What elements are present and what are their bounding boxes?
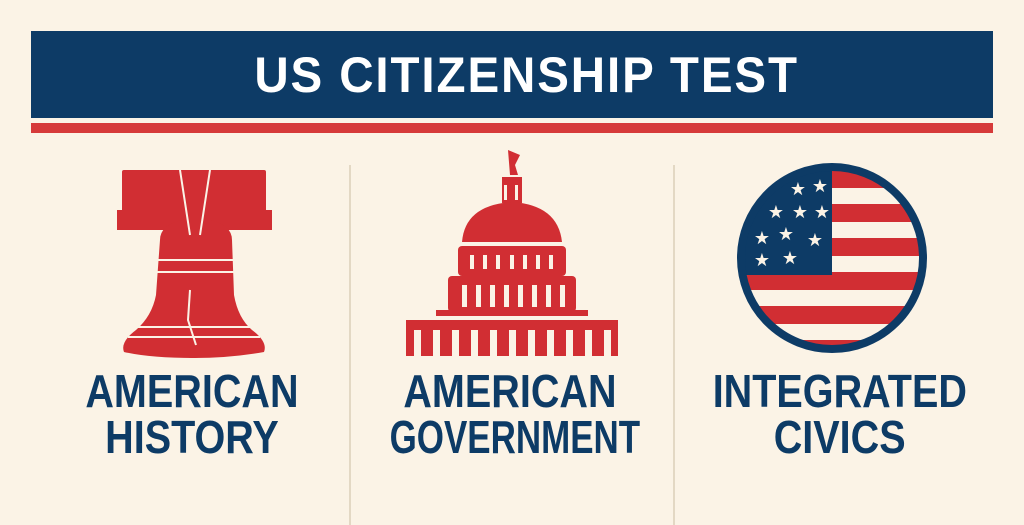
label: american history: AMERICAN <box>85 365 299 417</box>
icon: flag circle: ★ <box>814 202 830 222</box>
icon: liberty bell <box>117 170 272 358</box>
label: american government: AMERICAN <box>403 365 617 417</box>
icon: capitol building <box>406 150 618 356</box>
label: american government <box>390 365 640 463</box>
icon: flag circle: ★ <box>754 228 770 248</box>
icon: flag circle: ★ <box>790 179 806 199</box>
label: integrated civics <box>713 365 967 463</box>
title banner <box>31 31 993 118</box>
label: integrated civics: INTEGRATED <box>713 365 967 417</box>
label: integrated civics: CIVICS <box>774 411 906 463</box>
label: american history: HISTORY <box>105 411 279 463</box>
icon: flag circle: ★ <box>812 176 828 196</box>
icon: flag circle: ★ <box>782 248 798 268</box>
icon: flag circle: ★ <box>754 250 770 270</box>
icon: flag circle: ★ <box>807 230 823 250</box>
icon: flag circle: ★ <box>768 202 784 222</box>
label: american history <box>85 365 299 463</box>
icon: flag circle <box>737 163 927 353</box>
icon: flag circle: ★ <box>778 224 794 244</box>
icon: flag circle: ★ <box>792 202 808 222</box>
label: american government: GOVERNMENT <box>390 411 640 463</box>
title banner: US CITIZENSHIP TEST <box>255 47 799 103</box>
